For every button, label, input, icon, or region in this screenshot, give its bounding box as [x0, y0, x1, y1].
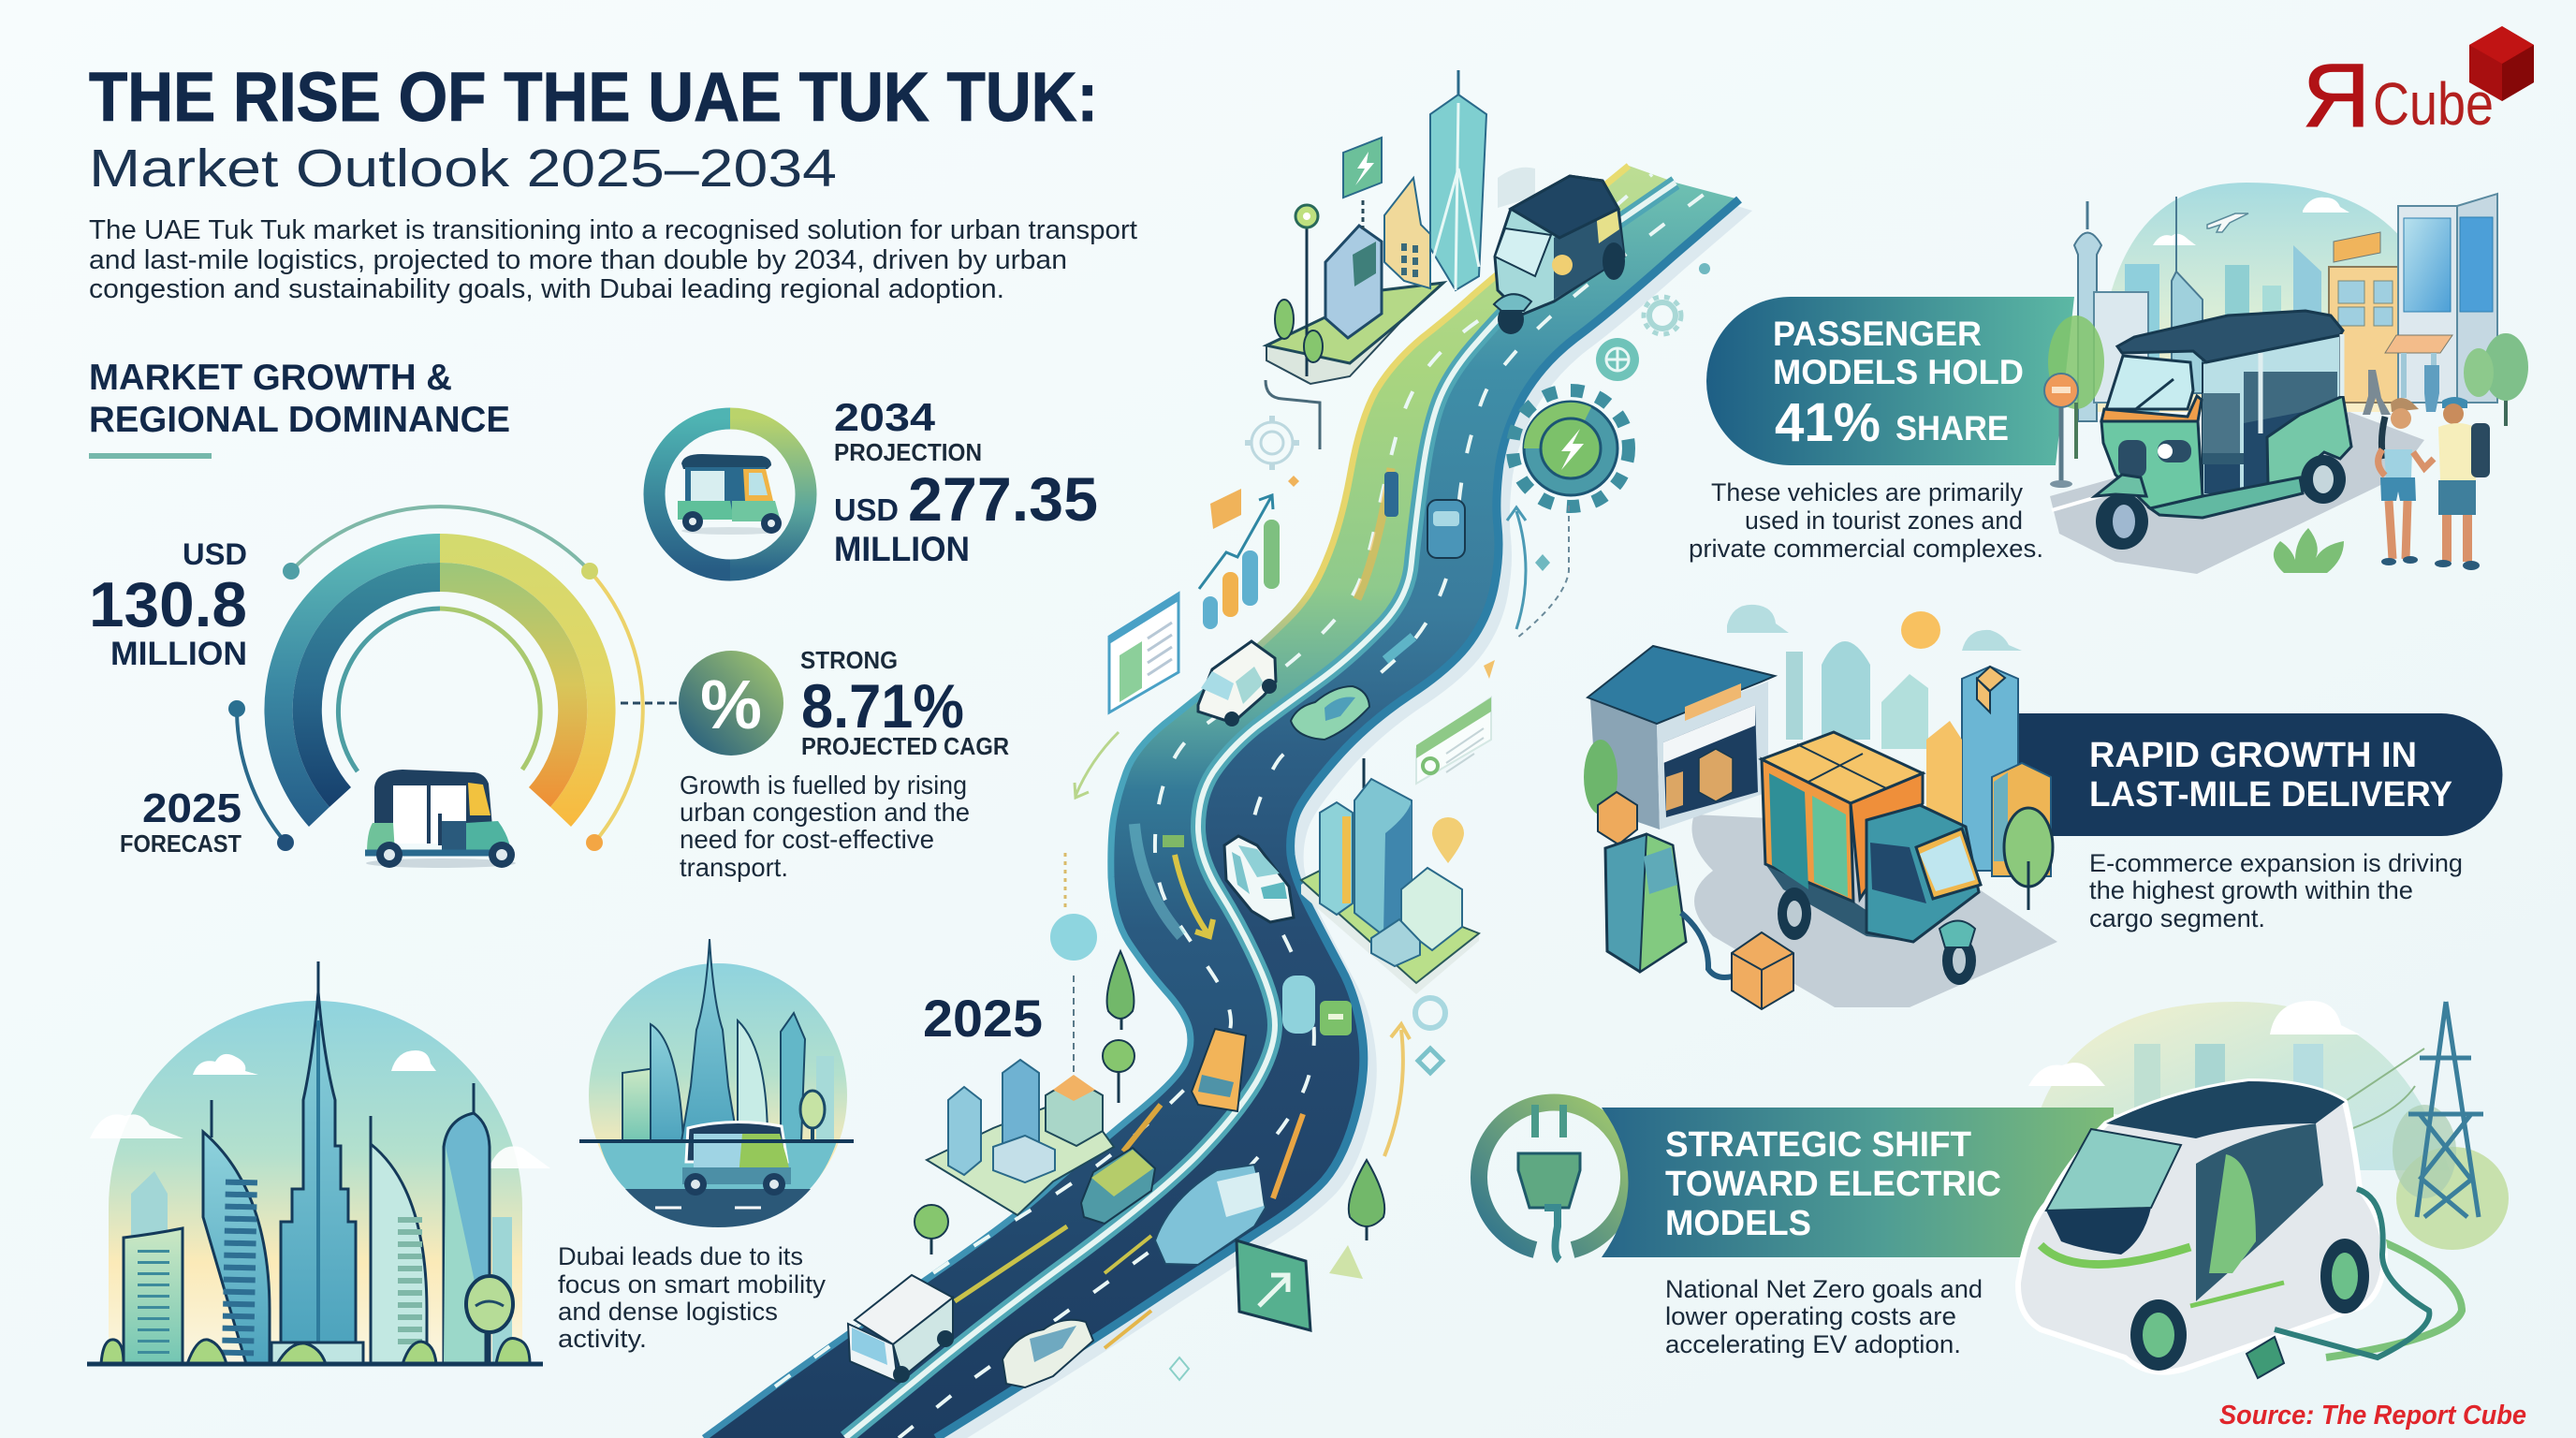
- passenger banner: MODELS HOLD: [1773, 353, 2024, 391]
- EV description: [1665, 1275, 1983, 1358]
- EV description: lower operating costs are: [1665, 1302, 1956, 1330]
- vehicle: white van middle: [1224, 836, 1294, 922]
- CAGR value: [800, 646, 1009, 760]
- plug ring icon: [1479, 1103, 1629, 1260]
- intro text: The UAE Tuk Tuk market is transitioning into a recognised solution for urban transport: [89, 215, 1137, 245]
- Dubai text: [558, 1242, 827, 1353]
- Dubai skyline illustration: [87, 961, 550, 1364]
- mid city block: [1301, 758, 1479, 994]
- delivery banner: RAPID GROWTH IN: [2089, 736, 2417, 775]
- delivery description: the highest growth within the: [2089, 876, 2413, 904]
- Dubai text: Dubai leads due to its: [558, 1242, 803, 1270]
- panel: passenger illustration: [2044, 183, 2528, 574]
- 2025 city block: [927, 853, 1114, 1215]
- percent badge: [621, 651, 783, 756]
- faint gear icon: [1245, 380, 1320, 470]
- delivery description: E-commerce expansion is driving: [2089, 849, 2463, 877]
- delivery cargo tuk tuk: [1762, 732, 1981, 985]
- logo: [2303, 26, 2534, 146]
- dashboard panel icon: [1075, 594, 1178, 798]
- CAGR value: 8.71%: [801, 671, 964, 741]
- 2034 projection value: MILLION: [834, 530, 970, 568]
- source note: Source: The Report Cube: [2219, 1401, 2526, 1431]
- electric car: [2018, 1081, 2429, 1378]
- EV banner: [1602, 1108, 2114, 1257]
- passenger banner: 41%: [1775, 392, 1881, 453]
- intro text: congestion and sustainability goals, with Dubai leading regional adoption.: [89, 274, 1004, 304]
- panel: delivery illustration: [1584, 605, 2057, 1009]
- CAGR description: transport.: [680, 853, 788, 882]
- passenger description: private commercial complexes.: [1689, 535, 2043, 563]
- CAGR description: [680, 770, 970, 882]
- gauge chart: [228, 506, 643, 851]
- gauge value: USD 130.8 million: USD: [183, 537, 247, 571]
- vehicles on upper road: [1384, 472, 1465, 558]
- 2025 road label: 2025: [923, 989, 1043, 1048]
- gauge value: USD 130.8 million: [89, 537, 247, 858]
- vehicle: green car: [1291, 686, 1369, 740]
- gauge value: USD 130.8 million: 130.8: [89, 569, 247, 640]
- vehicle: white van upper: [1198, 641, 1277, 726]
- tourists: [2378, 397, 2490, 570]
- EV banner: TOWARD ELECTRIC: [1665, 1165, 2001, 1204]
- CAGR value: PROJECTED CAGR: [801, 732, 1009, 760]
- icon: gauge tuk tuk: [365, 770, 516, 868]
- vehicle: blue bus: [1155, 1165, 1266, 1265]
- percent badge: %: [700, 666, 762, 743]
- 2034 projection value: [834, 395, 1098, 568]
- direction sign: [1237, 1240, 1310, 1330]
- section heading: market growth: REGIONAL DOMINANCE: [89, 400, 510, 440]
- vehicle: white car: [1003, 1320, 1093, 1387]
- winding road: [704, 166, 1752, 1438]
- vehicle: orange van: [1192, 1029, 1246, 1111]
- delivery banner: [2018, 713, 2503, 836]
- tuk tuk at road top: [1494, 176, 1625, 334]
- gauge value: USD 130.8 million: MILLION: [110, 636, 247, 672]
- intro text: and last-mile logistics, projected to more than double by 2034, driven by urban: [89, 245, 1067, 275]
- 2034 projection value: 277.35: [908, 464, 1098, 534]
- 2034 donut with tuk tuk icon: [654, 418, 806, 570]
- logo: Я: [2303, 46, 2370, 146]
- title: THE RISE OF THE UAE TUK TUK:: [89, 58, 1098, 136]
- 2034 projection value: 2034: [834, 395, 936, 439]
- passenger description: [1689, 478, 2043, 563]
- EV banner: STRATEGIC SHIFT: [1665, 1125, 1971, 1165]
- Dubai text: focus on smart mobility: [558, 1270, 827, 1299]
- Dubai circle illustration: [579, 939, 854, 1227]
- vehicle: green van: [1081, 1148, 1155, 1224]
- delivery banner: LAST-MILE DELIVERY: [2089, 775, 2452, 814]
- EV description: accelerating EV adoption.: [1665, 1330, 1961, 1358]
- intro text: [89, 215, 1137, 304]
- passenger banner: SHARE: [1895, 409, 2009, 448]
- title: [89, 58, 1098, 198]
- logo: Cube: [2373, 70, 2494, 138]
- CAGR description: Growth is fuelled by rising: [680, 770, 967, 800]
- gauge value: USD 130.8 million: 2025: [142, 785, 242, 831]
- 2034 projection value: USD: [834, 492, 899, 527]
- roadside trees: [915, 951, 1384, 1255]
- title: Market Outlook 2025–2034: [89, 139, 837, 198]
- EV description: National Net Zero goals and: [1665, 1275, 1983, 1303]
- EV banner: MODELS: [1665, 1204, 1811, 1243]
- passenger banner: PASSENGER: [1773, 315, 1982, 353]
- small vehicles lower bend: [1282, 976, 1352, 1035]
- gauge value: USD 130.8 million: FORECAST: [120, 829, 242, 858]
- vehicle: white truck: [848, 1275, 954, 1383]
- panel: EV background with pylon: [2028, 1001, 2509, 1357]
- big gear with bolt: [1513, 390, 1629, 506]
- CAGR value: STRONG: [800, 646, 898, 674]
- Dubai text: and dense logistics: [558, 1298, 778, 1326]
- CAGR description: need for cost-effective: [680, 825, 934, 854]
- 2034 projection value: PROJECTION: [834, 438, 982, 466]
- chart: rising bars and arrow: [1199, 476, 1299, 629]
- passenger description: used in tourist zones and: [1745, 506, 2023, 535]
- passenger description: These vehicles are primarily: [1711, 478, 2023, 506]
- Dubai text: activity.: [558, 1325, 647, 1353]
- small icons right of road: [1416, 263, 1710, 784]
- top city with charging station: [1266, 70, 1535, 384]
- CAGR description: urban congestion and the: [680, 798, 970, 827]
- section heading: market growth: MARKET GROWTH &: [89, 358, 452, 398]
- passenger banner: [1706, 297, 2074, 465]
- section heading: market growth: [89, 358, 510, 459]
- delivery description: [2089, 849, 2463, 932]
- delivery description: cargo segment.: [2089, 904, 2265, 932]
- arrows and icons near 2025 road: [1170, 998, 1445, 1380]
- passenger tuk tuk: [2095, 311, 2351, 550]
